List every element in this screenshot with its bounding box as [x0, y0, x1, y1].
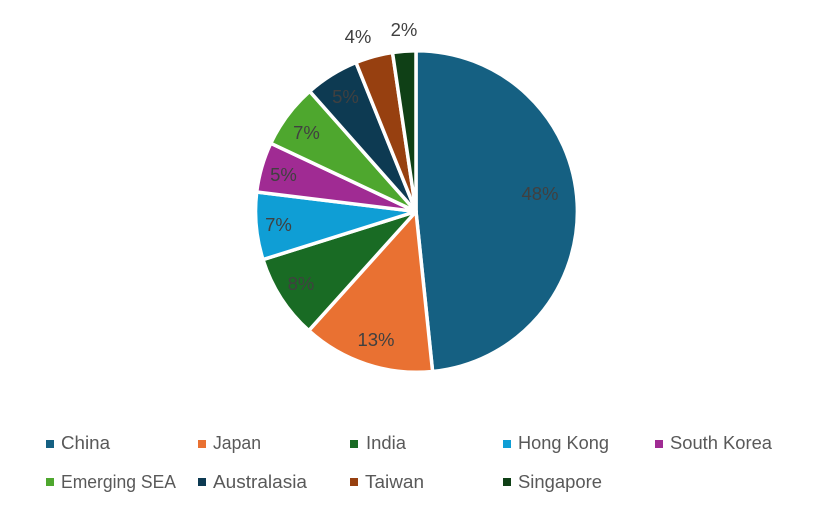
label: Hong Kong 7%: 7%: [265, 214, 292, 235]
legend item: China: China: [61, 432, 111, 453]
slice: Hong Kong: [256, 192, 416, 260]
legend item: Singapore: Singapore: [518, 471, 602, 492]
legend item: South Korea: South Korea: [670, 432, 773, 453]
slice: Taiwan: [356, 52, 416, 212]
legend item: Taiwan: Taiwan: [365, 471, 424, 492]
label: Australasia 5%: 5%: [332, 86, 359, 107]
slice: Singapore: [392, 51, 416, 212]
legend item: Japan: Japan: [213, 432, 261, 453]
legend: [46, 432, 773, 492]
label: China 48%: 48%: [521, 183, 559, 204]
label: Taiwan 4%: 4%: [345, 26, 371, 47]
legend item: Emerging SEA: Emerging SEA: [61, 471, 177, 492]
slice: Australasia: [310, 62, 416, 212]
slice: China: [416, 51, 577, 372]
label: Japan 13%: 13%: [357, 329, 395, 350]
legend item: Hong Kong: Hong Kong: [518, 432, 609, 453]
slice: South Korea: [257, 143, 416, 212]
label: India 8%: 8%: [288, 273, 314, 294]
pie chart: [256, 51, 577, 372]
slice: India: [263, 212, 416, 331]
legend item: India: India: [366, 432, 407, 453]
data labels: [265, 19, 559, 350]
slice: Japan: [309, 212, 433, 372]
label: South Korea 5%: 5%: [270, 164, 297, 185]
label: Singapore 2%: 2%: [391, 19, 417, 40]
slice: Emerging SEA: [271, 91, 416, 212]
label: Emerging SEA 7%: 7%: [293, 122, 320, 143]
legend item: Australasia: Australasia: [213, 471, 308, 492]
